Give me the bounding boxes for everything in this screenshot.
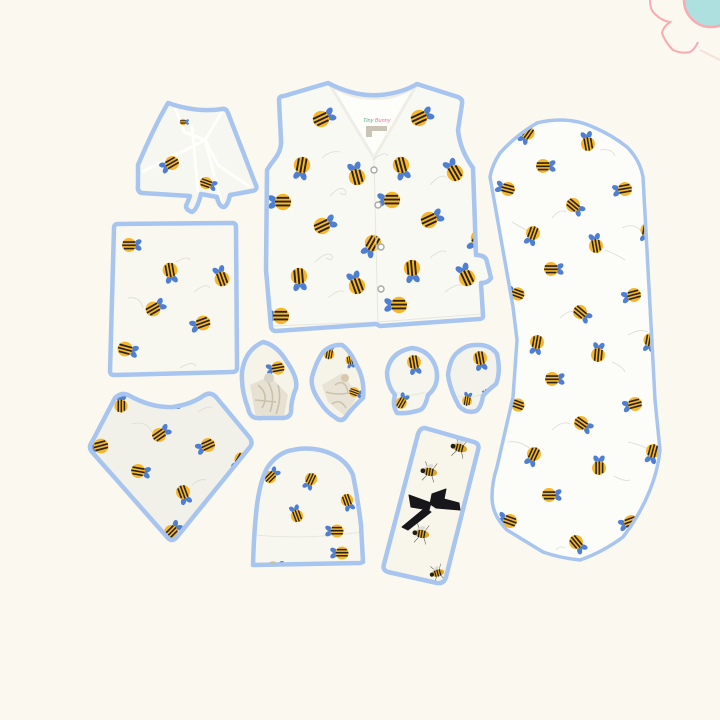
vest brand label: Tiny Bunny xyxy=(363,118,392,124)
cap outline xyxy=(253,448,363,565)
black ribbon xyxy=(402,489,460,530)
bib bee print xyxy=(92,396,243,538)
left bootie pair xyxy=(242,342,365,420)
hat bees xyxy=(157,119,219,193)
mitten one xyxy=(387,348,437,413)
square wash cloth xyxy=(110,223,237,375)
vest outline xyxy=(266,83,491,331)
cap bee print xyxy=(264,466,355,562)
vest bee print xyxy=(265,104,490,324)
vest neckline xyxy=(330,85,416,158)
rolled swaddle with ribbon xyxy=(384,428,478,583)
cloth bee print xyxy=(116,238,231,368)
swaddle outline xyxy=(384,428,478,583)
hat outline xyxy=(138,103,256,212)
long burp cloth xyxy=(490,120,662,560)
baby vest xyxy=(265,83,491,331)
mitten two xyxy=(448,345,499,412)
tie hat xyxy=(138,103,256,212)
cloth outline xyxy=(110,223,237,375)
mittens pair xyxy=(387,345,499,413)
hat folds xyxy=(142,107,250,205)
burp cloth outline xyxy=(490,120,660,560)
vest placket xyxy=(272,160,482,326)
bootie two xyxy=(312,343,365,420)
vest size tag xyxy=(366,126,387,137)
bib outline xyxy=(90,394,252,540)
burp cloth bee print xyxy=(493,124,662,557)
swaddle bee print xyxy=(411,436,469,583)
vest snaps xyxy=(371,167,384,292)
infographic stage xyxy=(88,0,720,586)
cap fold xyxy=(255,532,361,537)
baby cap xyxy=(253,448,363,576)
bandana bib xyxy=(85,393,252,542)
flower decoration top right xyxy=(650,0,720,60)
bootie one xyxy=(242,342,296,418)
